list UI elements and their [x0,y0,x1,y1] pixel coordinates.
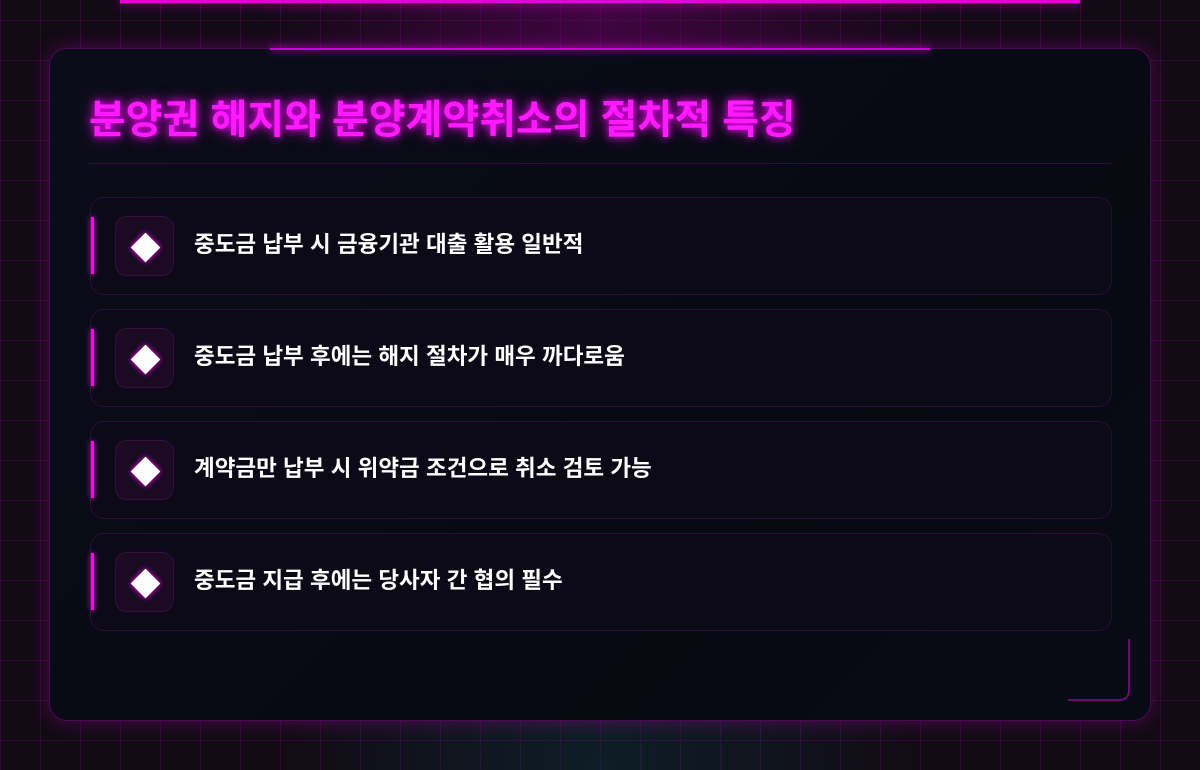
text 4: 중도금 지급 후에는 당사자 간 협의 필수 [194,568,563,593]
text 3: 계약금만 납부 시 위약금 조건으로 취소 검토 가능 [194,456,652,481]
text 2: 중도금 납부 후에는 해지 절차가 매우 까다로움 [194,344,625,369]
icon: diamond [115,440,174,500]
icon: diamond [115,328,174,388]
item 2 [90,309,1112,407]
icon: diamond [115,552,174,612]
icon: diamond [115,216,174,276]
text 1: 중도금 납부 시 금융기관 대출 활용 일반적 [194,232,583,257]
item 3 [90,421,1112,519]
title: 분양권 해지와 분양계약취소의 절차적 특징 [89,98,796,142]
item 1 [90,197,1112,295]
item 4 [90,533,1112,631]
